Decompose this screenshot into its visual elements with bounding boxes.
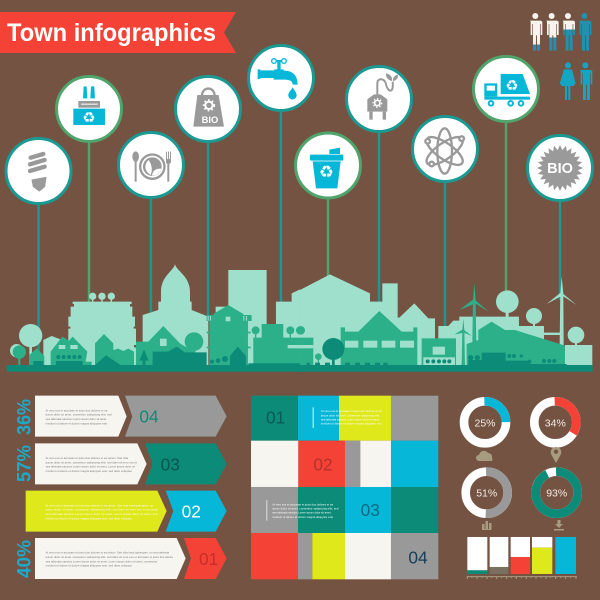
- skyline left half: [7, 264, 307, 372]
- donut chart 93%: 93%: [546, 488, 567, 500]
- row 01: sea takimata sanctus Lorem ipsum dolor sit amet, Lorem ipsum dolor sit amet, consetetur: [46, 559, 157, 563]
- dark front shapes: [7, 347, 307, 372]
- circle: factory: [56, 76, 122, 142]
- arrow list panel: [26, 396, 227, 579]
- row 04: [35, 396, 227, 437]
- grid number 03: 03: [361, 500, 380, 520]
- circle: plate: [118, 132, 184, 198]
- light trees: [10, 324, 61, 365]
- row 02: [26, 491, 227, 532]
- tall tower: [216, 270, 300, 365]
- row 01: invidunt ut labore et dolore magna aliquyam erat, sed diam voluptua: [46, 564, 132, 568]
- percent label 36%: 36%: [14, 399, 36, 435]
- icon: atom: [423, 128, 467, 174]
- skyline right half: [296, 274, 593, 372]
- circle: water tap: [248, 46, 314, 110]
- grid number 02: 02: [313, 454, 333, 474]
- row 04: 04: [139, 406, 159, 426]
- icon: bio bag: BIO: [202, 115, 218, 125]
- row 04: At vero eos et accusam et justo duo dolores et ea: [46, 408, 108, 412]
- percent label 57%: 57%: [14, 445, 36, 482]
- row 02: 02: [182, 502, 201, 522]
- row 03: 03: [161, 455, 180, 475]
- colour block grid: [251, 396, 438, 579]
- gas holder building: [68, 302, 136, 365]
- donut chart 25%: [464, 401, 506, 443]
- capitol dome: [143, 264, 208, 365]
- circle: atom: [412, 116, 478, 182]
- icon: download: [554, 520, 564, 530]
- row 03: [35, 443, 227, 484]
- circle: bio badge: [528, 136, 592, 200]
- circle: recycle bin: [296, 133, 360, 198]
- stacked bar chart: [467, 537, 577, 579]
- icon: bio star badge: BIO: [547, 161, 573, 177]
- grid text block upper: At vero eos et accusam et justo duo dolores et ea: [321, 409, 382, 413]
- grid text block lower: sea takimata sanctus Lorem ipsum dolor sit amet,: [272, 511, 332, 515]
- grid text block upper: ipsum dolor sit amet, consetetur sadipscing elitr,: [321, 413, 380, 417]
- icon: plug with leaves: [367, 73, 398, 120]
- circle: bio plug: [346, 66, 412, 132]
- light wind turbine: [547, 277, 577, 345]
- dark factory details: [297, 338, 593, 372]
- row 02: At vero eos et accusam et justo duo dolores et ea rebum. Stet clita kasd gubergren, no: [46, 503, 154, 507]
- grid number 04: 04: [408, 547, 428, 567]
- row 04: invidunt ut labore et dolore magna aliquyam erat: [46, 421, 107, 425]
- grid text block upper: invidunt ut labore et dolore magna aliquyam erat: [321, 422, 382, 426]
- light factory halls: [300, 274, 592, 365]
- row 01: At vero eos et accusam et justo duo dolores et ea rebum. Stet clita kasd gubergren, no sea takimata: [46, 551, 169, 555]
- percent label 40%: 40%: [14, 540, 36, 578]
- grid text block lower: At vero eos et accusam et justo duo dolores et ea: [272, 502, 334, 506]
- donut chart 34%: [534, 401, 576, 443]
- row 03: invidunt ut labore et dolore magna aliquyam erat, sed diam voluptua: [46, 469, 132, 473]
- capitol front houses: [13, 305, 304, 365]
- grid text block lower: ipsum dolor sit amet, consetetur sadipscing elitr, sed: [272, 506, 339, 510]
- grid text block lower: [266, 500, 339, 521]
- row 04: sea takimata sanctus Lorem ipsum dolor sit amet,: [46, 417, 107, 421]
- icon: energy saving bulb: [30, 154, 46, 191]
- roof globes: [89, 293, 115, 303]
- icon: mini bars: [482, 521, 492, 530]
- row 03: ipsum dolor sit amet, consetetur sadipscing elitr, sed diam sit vero eos et: [46, 460, 137, 464]
- title banner: Town infographics: [7, 19, 216, 47]
- people pictograms: [530, 13, 592, 100]
- row 02: invidunt ut labore et dolore magna aliquyam erat, sed diam voluptua: [46, 516, 132, 520]
- donut chart 51%: [466, 472, 508, 514]
- row 03: At vero eos et accusam et justo duo dolores et ea rebum. Stet clita: [46, 456, 129, 460]
- grid text block upper: sea takimata sanctus Lorem ipsum dolor sit amet,: [321, 417, 380, 421]
- donut chart 34%: 34%: [545, 417, 566, 429]
- circle: bio bag: [176, 76, 240, 142]
- title banner: [0, 12, 236, 53]
- circle: bulb: [6, 138, 71, 204]
- circle: recycling truck: [474, 56, 538, 122]
- icon: water tap: [258, 59, 298, 99]
- row 01: 01: [199, 549, 218, 569]
- chart axis: [467, 577, 577, 579]
- icon: recycle bin: ♻: [319, 163, 334, 182]
- donut chart 51%: 51%: [476, 488, 497, 500]
- icon: cloud: [476, 451, 492, 461]
- icon: plate with leaves: [132, 151, 171, 182]
- row 02: sea takimata sanctus Lorem ipsum dolor sit amet, Lorem ipsum dolor sit amet, sed: [46, 512, 158, 516]
- row 04: ipsum dolor sit amet, consetetur sadipscing elitr, sed: [46, 413, 112, 417]
- icon: recycling truck: ♻: [505, 78, 519, 95]
- factory windows: [300, 341, 455, 365]
- windows: [59, 316, 300, 349]
- grid text block lower: invidunt ut labore et dolore magna aliquyam erat: [272, 515, 333, 519]
- green factory: [296, 283, 565, 365]
- poles: [38, 108, 560, 352]
- icon: recycling factory: ♻: [82, 109, 96, 126]
- row 01: ipsum dolor sit amet, consetetur sadipscing elitr, sed diam sit vero eos et accusam et justo duo dolore: [46, 555, 173, 559]
- donut chart 25%: 25%: [474, 417, 496, 429]
- light trees: [496, 290, 584, 346]
- icon: map pin: [551, 447, 561, 463]
- grid number 01: 01: [266, 407, 285, 427]
- row 01: [35, 538, 227, 579]
- row 03: sea takimata sanctus Lorem ipsum dolor sit amet, Lorem ipsum dolor sit: [46, 465, 135, 469]
- donut chart 93%: [536, 472, 578, 514]
- grid text block upper: [313, 407, 382, 428]
- row 02: ipsum dolor sit amet, consetetur sadipscing elitr, sed diam sit vero eos et accusam: [46, 508, 159, 512]
